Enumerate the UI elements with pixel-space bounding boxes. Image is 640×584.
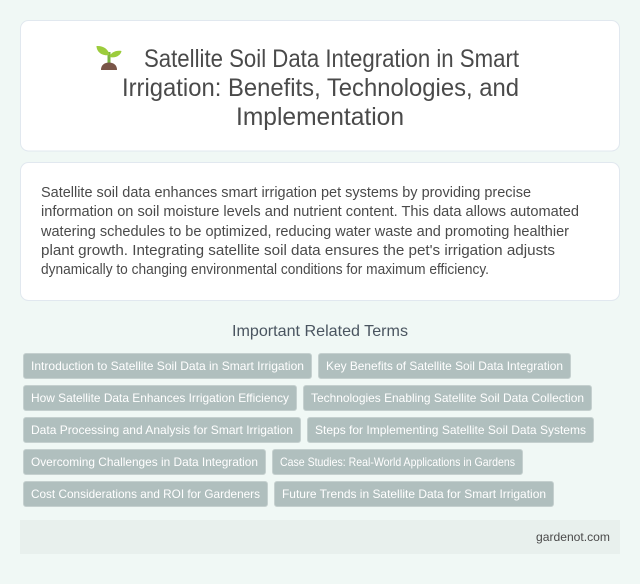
tag: Future Trends in Satellite Data for Smart Irrigation <box>282 487 546 501</box>
tag: Case Studies: Real-World Applications in Gardens <box>280 455 515 469</box>
description text <box>40 185 579 278</box>
tag <box>274 482 554 506</box>
title <box>122 45 519 131</box>
description text: watering schedules to be optimized, reducing water waste and promoting healthier <box>40 224 569 240</box>
description text: information on soil moisture levels and nutrient content. This data allows automated <box>41 204 579 220</box>
panel: description <box>20 162 620 300</box>
tag: Technologies Enabling Satellite Soil Data Collection <box>311 391 584 405</box>
tag <box>318 354 570 378</box>
tag: How Satellite Data Enhances Irrigation Efficiency <box>31 391 289 405</box>
heading: related terms: Important Related Terms <box>232 323 408 340</box>
title: Satellite Soil Data Integration in Smart <box>144 45 519 73</box>
tag: Overcoming Challenges in Data Integration <box>31 455 258 469</box>
icon: seedling <box>96 46 122 70</box>
tag: Steps for Implementing Satellite Soil Data Systems <box>315 423 586 437</box>
description text: Satellite soil data enhances smart irrigation pet systems by providing precise <box>41 185 531 201</box>
title: Irrigation: Benefits, Technologies, and <box>122 74 519 102</box>
tag: Key Benefits of Satellite Soil Data Integration <box>326 359 563 373</box>
tag group <box>24 354 594 506</box>
description text: dynamically to changing environmental conditions for maximum efficiency. <box>41 262 489 278</box>
footer: gardenot.com <box>536 530 610 544</box>
tag: Cost Considerations and ROI for Gardeners <box>31 487 260 501</box>
tag <box>308 418 594 442</box>
title: Implementation <box>236 103 404 131</box>
tag <box>24 450 266 474</box>
tag <box>304 386 592 410</box>
tag <box>272 450 522 474</box>
tag <box>24 418 300 442</box>
tag <box>24 386 296 410</box>
tag: Data Processing and Analysis for Smart Irrigation <box>31 423 293 437</box>
tag: Introduction to Satellite Soil Data in Smart Irrigation <box>31 359 304 373</box>
description text: plant growth. Integrating satellite soil data ensures the pet's irrigation adjusts <box>41 243 555 259</box>
tag <box>24 354 312 378</box>
tag <box>24 482 268 506</box>
footer <box>20 520 620 554</box>
panel: title card <box>20 20 620 151</box>
